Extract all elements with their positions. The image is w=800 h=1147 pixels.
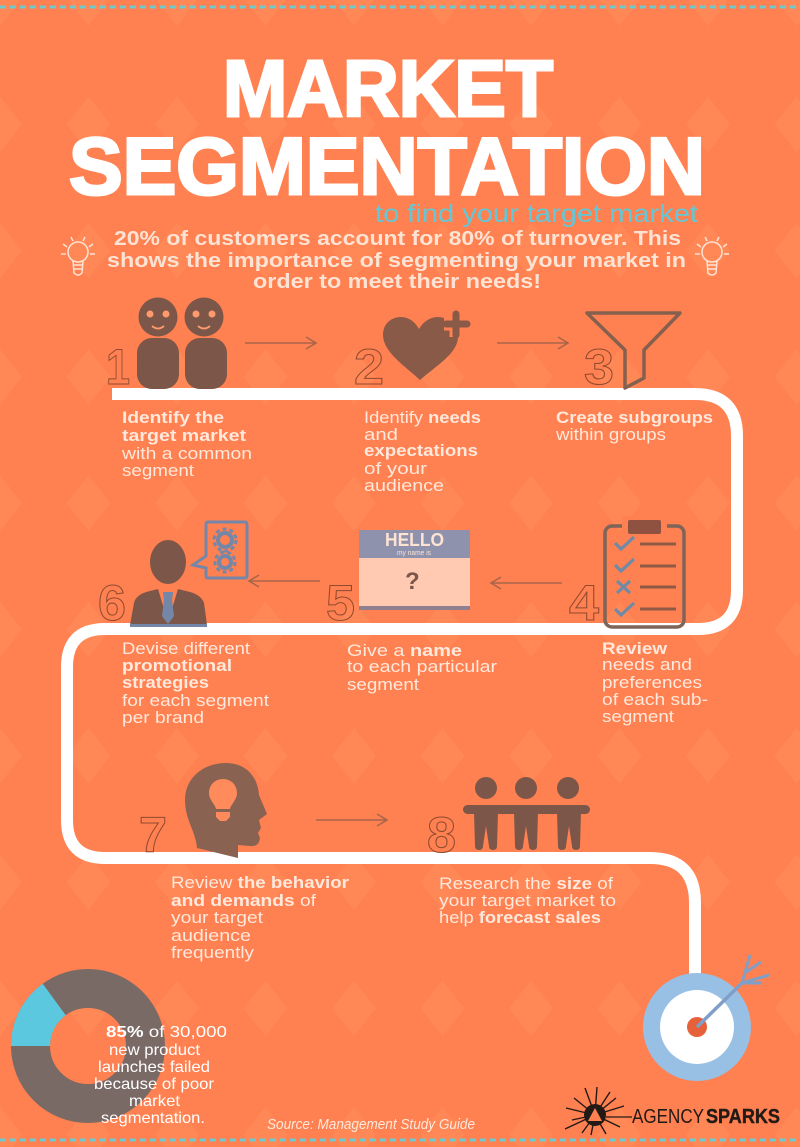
step 6 number: 6: [98, 575, 126, 631]
arrow 5 to 6: [249, 575, 320, 587]
winding white path: [67, 394, 737, 980]
icon: hello name tag: ?: [405, 568, 420, 595]
icon: hello name tag: [359, 530, 470, 610]
step 5 text: [347, 641, 497, 694]
donut caption: [94, 1024, 227, 1127]
icon: hello name tag: my name is: [397, 550, 431, 557]
arrow 1 to 2: [245, 337, 316, 349]
step 2 text: [364, 408, 481, 495]
step 1 text: [121, 408, 252, 480]
step 5 text: to each particular: [347, 657, 497, 676]
step 2 text: expectations: [364, 441, 478, 460]
step 8 text: help forecast sales: [439, 908, 601, 927]
step 1 number: 1: [106, 339, 130, 395]
step 3 number: 3: [584, 339, 614, 395]
intro text: [107, 228, 686, 293]
donut chart: [11, 984, 145, 1104]
step 2 text: Identify needs: [364, 408, 481, 427]
icon: manager with gears: [130, 522, 247, 627]
step 5 text: segment: [347, 675, 419, 694]
intro text: order to meet their needs!: [253, 271, 541, 293]
icon: funnel: [587, 313, 680, 388]
step 5 text: Give a name: [347, 641, 462, 660]
step 4 number: 4: [569, 575, 599, 631]
step 3 text: within groups: [555, 425, 666, 444]
step 8 text: Research the size of: [439, 874, 613, 893]
step 4 text: Review: [602, 639, 668, 658]
step 4 text: preferences: [602, 673, 702, 692]
donut caption: launches failed: [98, 1059, 210, 1076]
logo: agency sparks: [565, 1087, 780, 1135]
icon: head with light bulb: [185, 763, 267, 858]
step 4 text: segment: [602, 707, 674, 726]
step 6 text: for each segment: [122, 691, 269, 710]
step 6 text: promotional: [122, 656, 232, 675]
step 2 text: and: [364, 425, 398, 444]
step 7 number: 7: [139, 807, 167, 863]
step 1 text: with a common: [121, 444, 252, 463]
step 3 text: [555, 408, 713, 444]
intro text: shows the importance of segmenting your market in: [107, 250, 686, 272]
arrow 2 to 3: [497, 337, 568, 349]
icon: three people linked: [463, 777, 590, 850]
step 8 number: 8: [427, 807, 456, 863]
icon: target with arrow: [643, 955, 769, 1081]
icon: checklist: [605, 516, 684, 627]
icon: heart plus: [383, 312, 469, 380]
subtitle: to find your target market: [375, 200, 698, 228]
title: [69, 44, 705, 212]
icon: hello name tag: HELLO: [385, 530, 444, 550]
donut caption: new product: [109, 1042, 201, 1059]
step 1 text: target market: [122, 426, 246, 445]
step 1 text: Identify the: [122, 408, 224, 427]
step 6 text: Devise different: [122, 639, 250, 658]
step 2 text: audience: [364, 476, 444, 495]
icon: light bulb right: [695, 237, 729, 275]
title: SEGMENTATION: [69, 122, 705, 212]
title: MARKET: [223, 44, 553, 133]
step 4 text: needs and: [602, 655, 692, 674]
step 8 text: [439, 874, 616, 927]
arrow 4 to 5: [491, 577, 562, 589]
step 8 text: your target market to: [439, 891, 616, 910]
step 3 text: Create subgroups: [556, 408, 713, 427]
arrow 7 to 8: [316, 814, 387, 826]
source: Source: Management Study Guide: [267, 1116, 475, 1133]
step 7 text: frequently: [171, 943, 255, 962]
intro text: 20% of customers account for 80% of turnover. This: [114, 228, 681, 250]
donut caption: market: [129, 1093, 181, 1110]
icon: light bulb left: [61, 237, 95, 275]
step 2 text: of your: [364, 459, 427, 478]
step 7 text: and demands of: [171, 891, 316, 910]
step 6 text: [122, 639, 269, 727]
step 4 text: of each sub-: [602, 690, 708, 709]
icon: two people: [137, 298, 227, 389]
step 6 text: per brand: [122, 708, 204, 727]
logo: agency sparks: AGENCY: [632, 1106, 704, 1128]
step 7 text: [171, 873, 349, 962]
step 2 number: 2: [354, 339, 384, 395]
step 6 text: strategies: [122, 673, 209, 692]
step 1 text: segment: [122, 461, 194, 480]
step 5 number: 5: [326, 575, 355, 631]
donut caption: 85% of 30,000: [106, 1024, 227, 1041]
step 7 text: audience: [171, 926, 251, 945]
logo: agency sparks: SPARKS: [706, 1106, 780, 1128]
step 4 text: [602, 639, 708, 726]
donut caption: because of poor: [94, 1076, 215, 1093]
donut caption: segmentation.: [101, 1110, 205, 1127]
step 7 text: your target: [171, 908, 263, 927]
step 7 text: Review the behavior: [171, 873, 349, 892]
